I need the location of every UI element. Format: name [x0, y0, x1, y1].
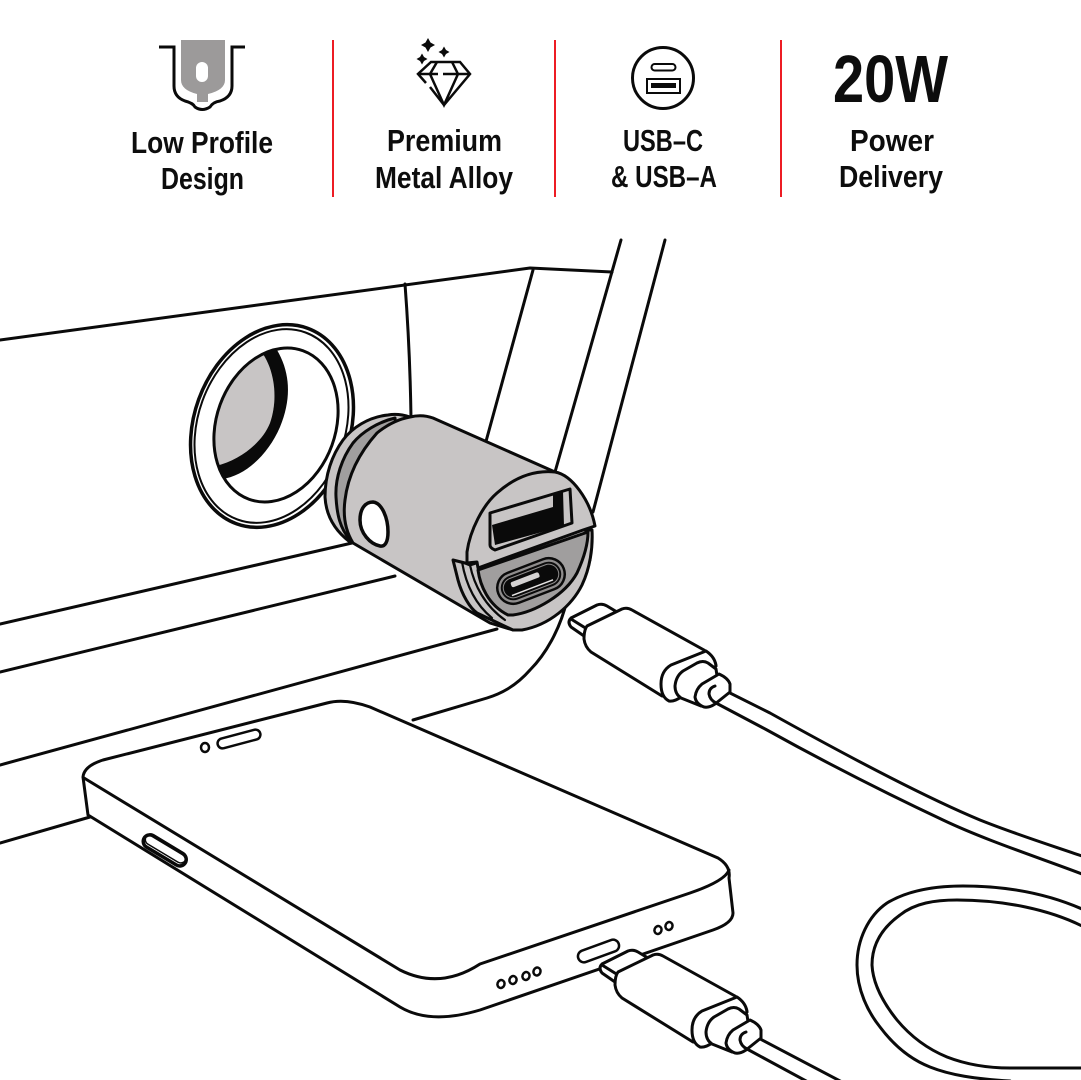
cable to charger — [716, 686, 1081, 874]
label: low profile design: Low Profile — [131, 125, 273, 160]
rim detail — [462, 562, 505, 620]
icon: usb ports — [632, 48, 694, 108]
illustration: smartphone — [83, 701, 733, 1017]
mounting hole — [360, 502, 388, 546]
socket opening — [212, 346, 340, 504]
label: power delivery: Delivery — [839, 159, 944, 194]
usb-c connector — [600, 950, 761, 1053]
charger flange — [325, 414, 420, 542]
label: usb-c and usb-a: & USB–A — [611, 159, 717, 194]
usb-c panel — [478, 532, 588, 615]
cable to phone — [747, 1032, 842, 1080]
phone body — [83, 701, 733, 1017]
icon: diamond with sparkles — [416, 38, 470, 105]
usb-c connector — [569, 604, 730, 707]
side button — [141, 832, 189, 868]
feature: low profile design — [131, 40, 273, 196]
icon: low profile plug — [159, 40, 245, 110]
socket outer ring — [163, 302, 381, 550]
label: premium metal alloy: Premium — [387, 123, 502, 158]
phone top surface edge — [84, 778, 729, 979]
illustration: car dashboard — [0, 240, 665, 843]
charger collar band — [336, 418, 400, 540]
illustration: upper usb-c cable — [569, 604, 1081, 874]
illustration: power socket — [188, 322, 356, 530]
feature: premium metal alloy — [375, 38, 514, 195]
charger body — [344, 416, 590, 630]
figure: 20W: 20W — [833, 42, 949, 117]
usb-c port — [493, 554, 569, 608]
feature strip — [131, 38, 949, 196]
earpiece and camera — [201, 728, 262, 752]
feature: usb ports — [611, 48, 717, 194]
feature: 20w power delivery — [833, 42, 949, 194]
illustration: car charger — [325, 414, 595, 630]
charging port — [576, 938, 621, 964]
label: premium metal alloy: Metal Alloy — [375, 160, 514, 195]
label: low profile design: Design — [161, 161, 244, 196]
usb-a port — [490, 489, 572, 550]
illustration: cable coil — [857, 886, 1081, 1080]
label: power delivery: Power — [850, 123, 934, 158]
charger face — [467, 472, 595, 568]
label: usb-c and usb-a: USB–C — [623, 123, 703, 158]
charger face lower rim — [453, 530, 592, 630]
illustration: lower usb-c cable — [600, 950, 842, 1080]
speaker grille — [496, 921, 674, 989]
